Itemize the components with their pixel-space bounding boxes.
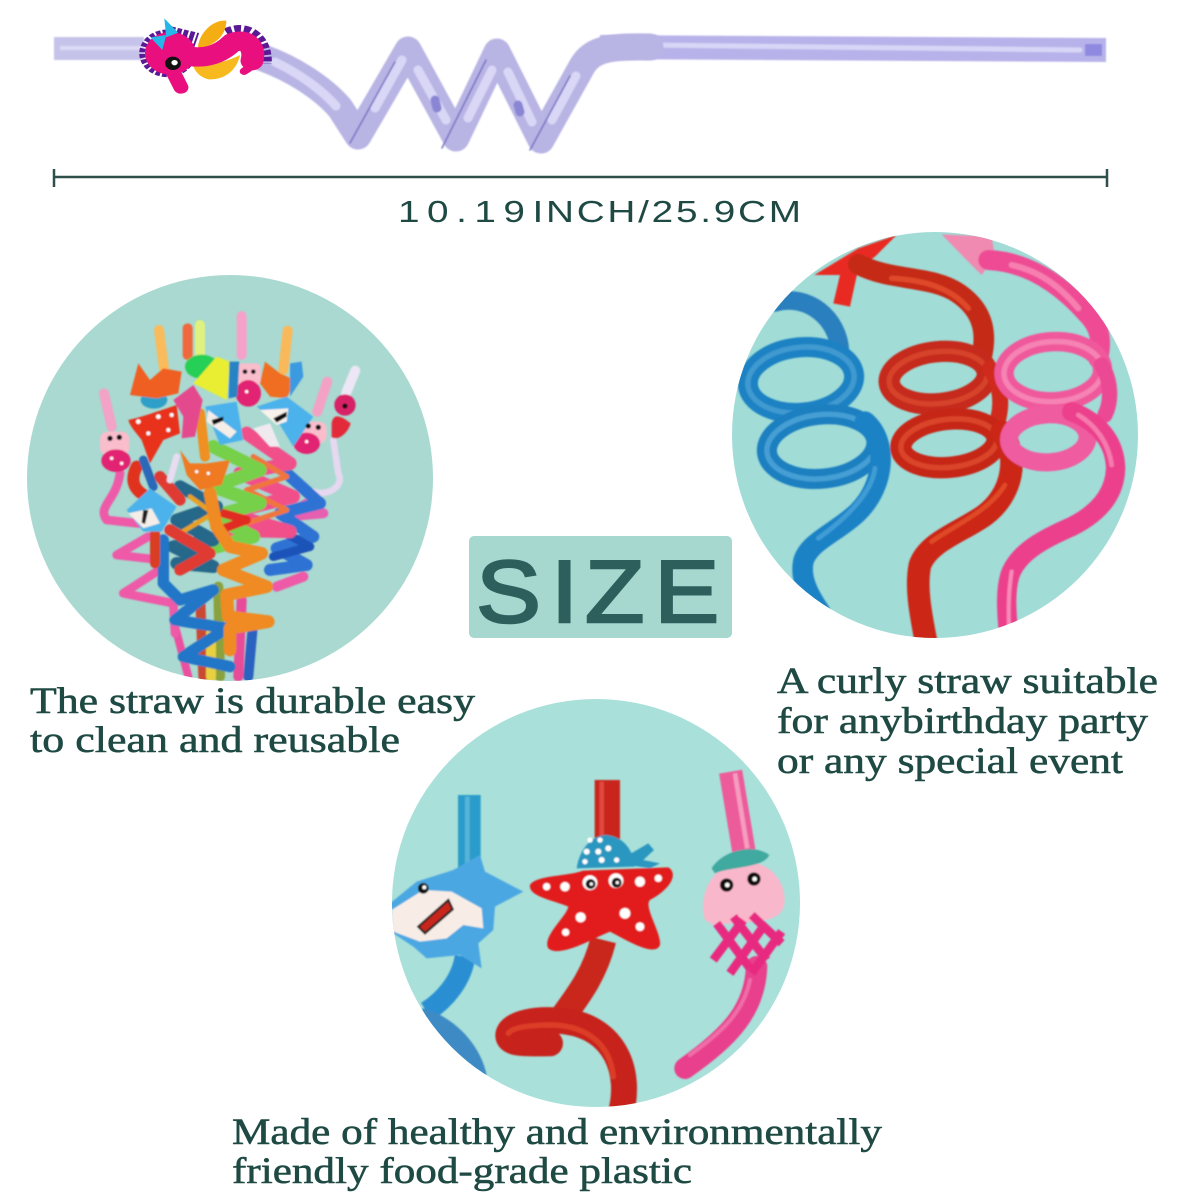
caption: left: The straw is durable easy	[30, 681, 476, 722]
blue shark straw	[390, 795, 523, 1093]
caption: bottom: friendly food-grade plastic	[232, 1151, 692, 1192]
small figures	[100, 355, 356, 532]
red curly straw	[814, 235, 1011, 645]
caption: left: to clean and reusable	[30, 720, 400, 761]
badge: SIZE: SIZE	[476, 542, 719, 641]
pink curly straw	[942, 234, 1116, 632]
caption: right: for anybirthday party	[777, 701, 1149, 742]
panel: left circle bouquet of straws	[27, 275, 433, 681]
length label: 10.19INCH/25.9CM	[398, 195, 804, 229]
trunk and curls	[104, 433, 340, 677]
panel: right circle curly straws	[732, 232, 1138, 645]
top straw with seahorse	[54, 18, 1106, 150]
red starfish straw	[508, 780, 673, 1117]
caption: right: or any special event	[777, 741, 1124, 782]
caption: bottom	[232, 1112, 883, 1192]
panel: bottom circle three straws	[390, 699, 800, 1117]
dimension line	[54, 169, 1107, 187]
icon: seahorse	[142, 18, 260, 87]
top stems	[104, 316, 355, 427]
straw curly section	[263, 47, 650, 150]
pink jellyfish straw	[685, 772, 785, 1068]
caption: left	[30, 681, 476, 761]
caption: bottom: Made of healthy and environmentally	[232, 1112, 883, 1153]
straw right straight section	[600, 45, 1106, 50]
caption: right: A curly straw suitable	[777, 661, 1158, 702]
caption: right	[777, 661, 1158, 782]
straw left straight section	[54, 37, 144, 60]
blue curly straw	[745, 300, 881, 612]
